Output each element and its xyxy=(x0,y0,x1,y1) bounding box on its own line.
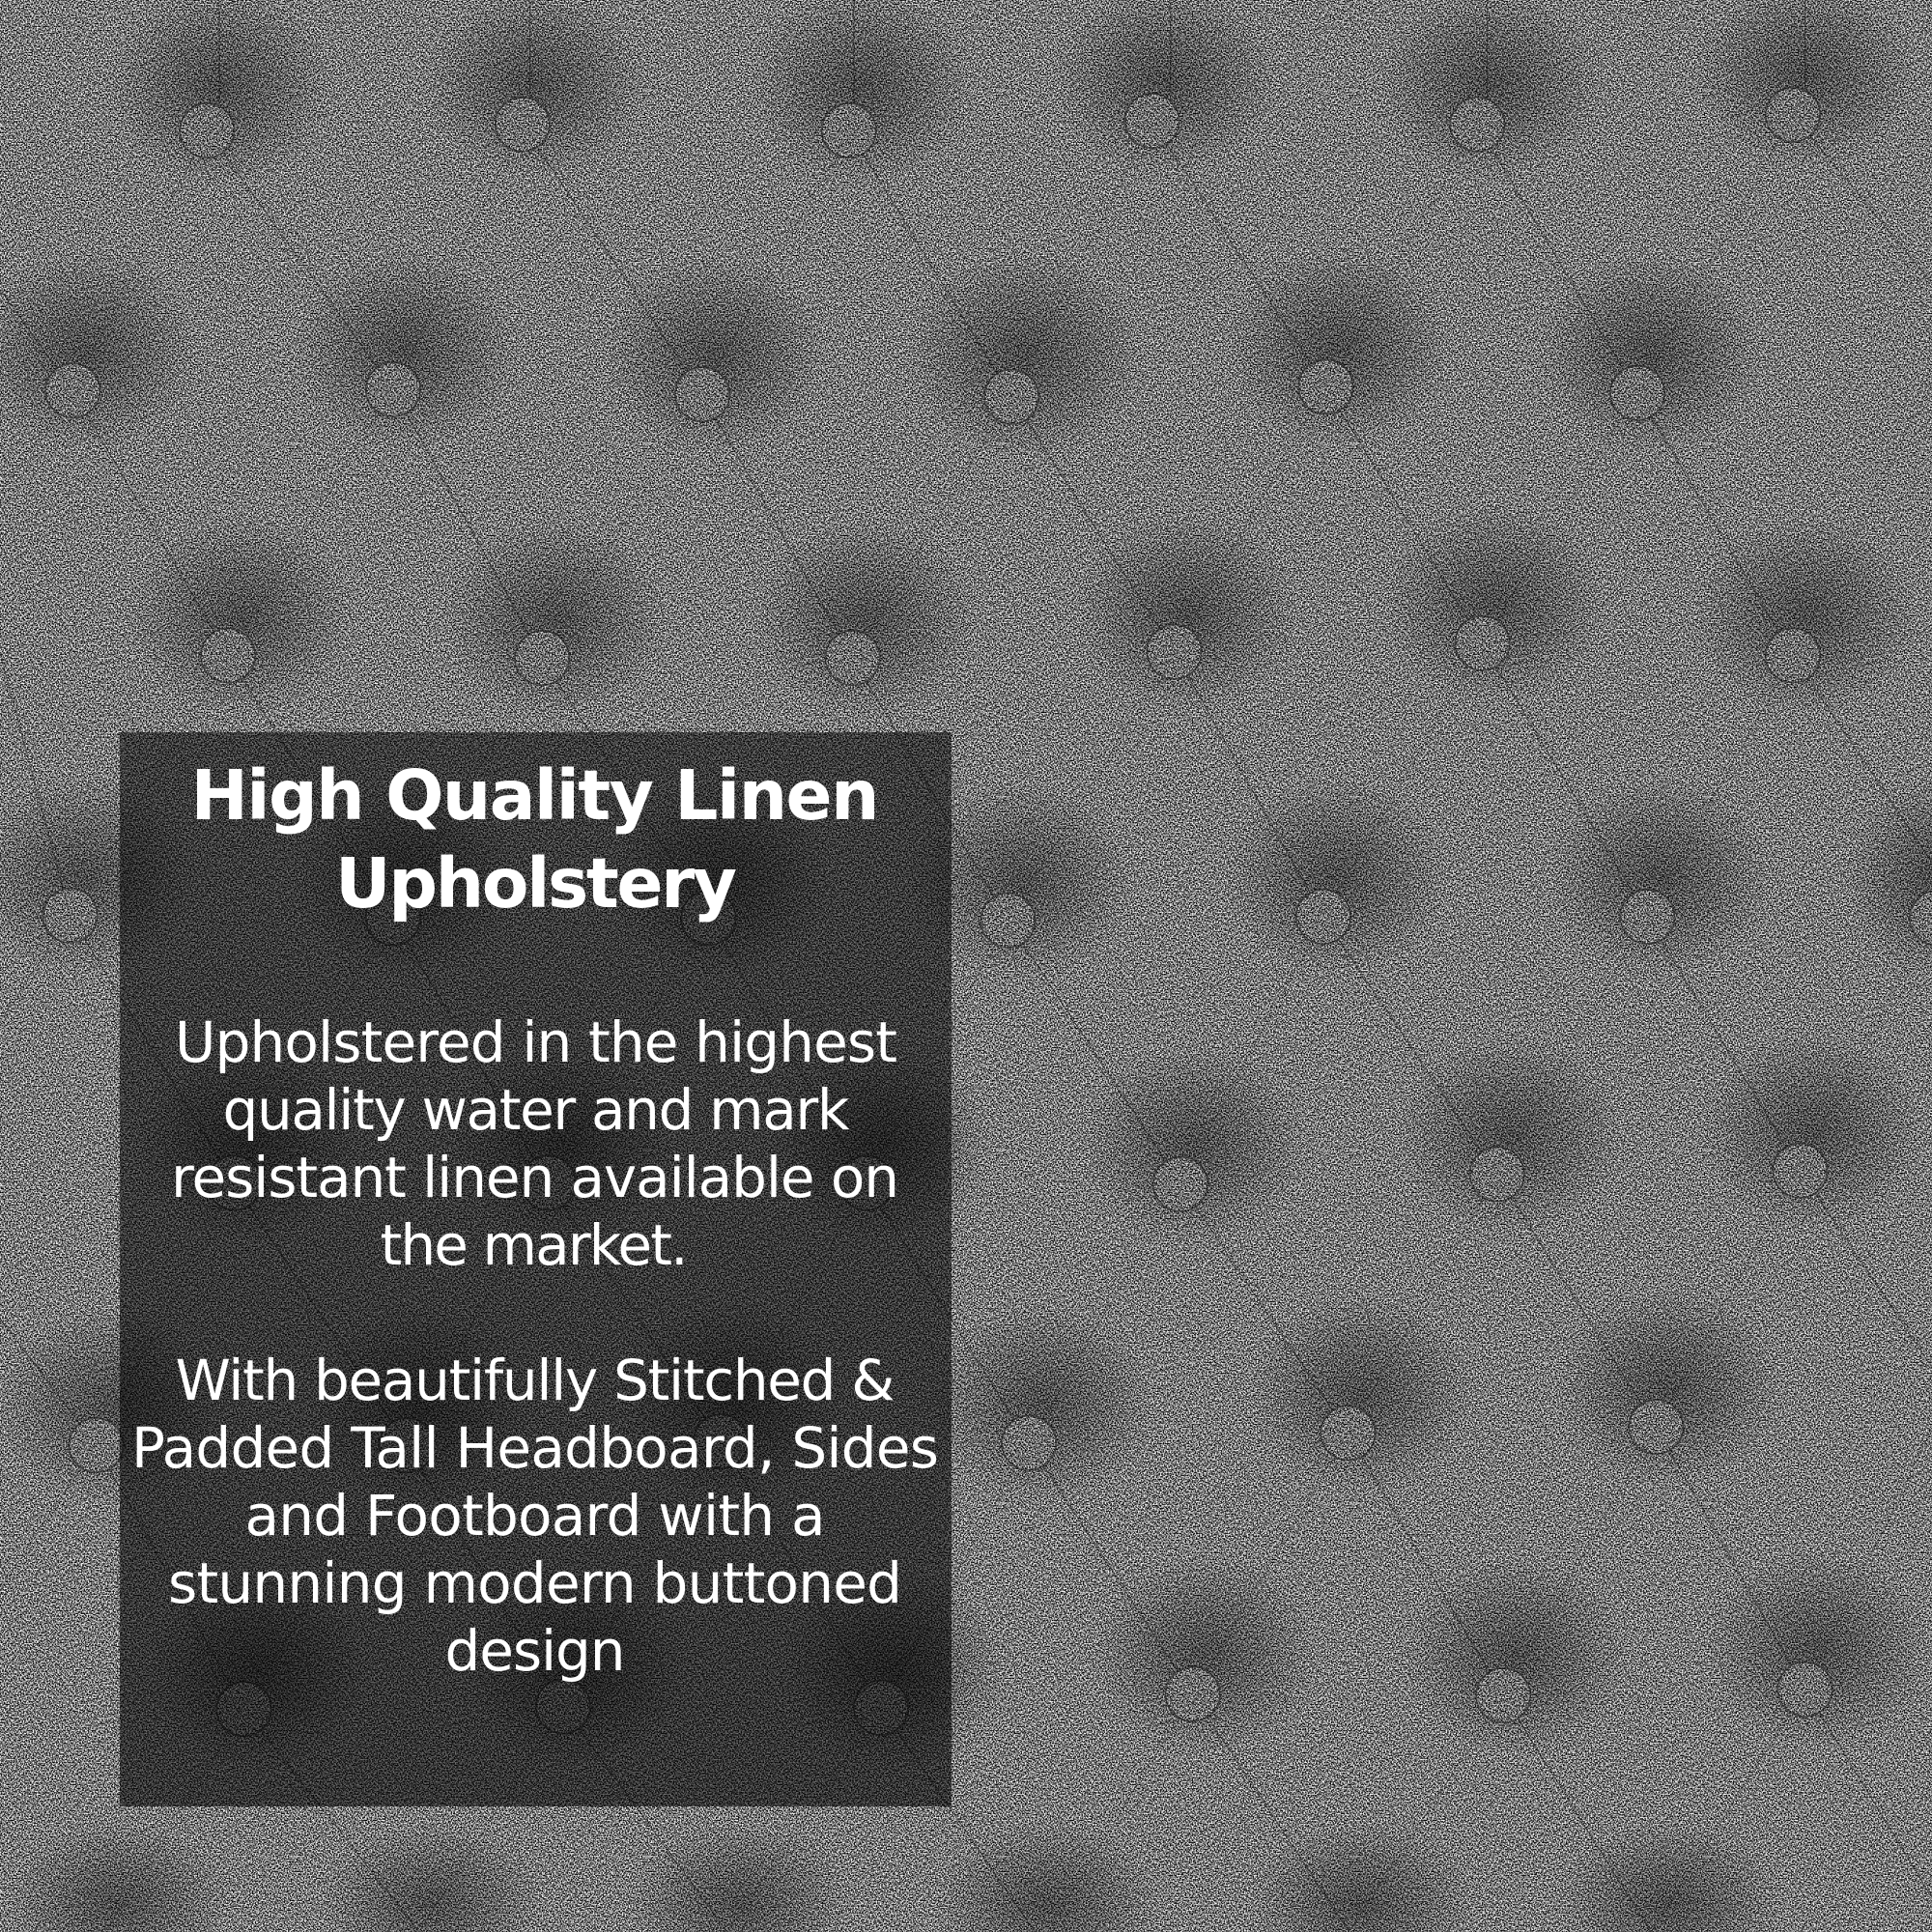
panel background xyxy=(120,732,952,1806)
heading xyxy=(191,755,879,923)
text block: headboard description: With beautifully Stitched & xyxy=(176,1348,895,1413)
text block: linen description: Upholstered in the highest xyxy=(175,1009,897,1075)
text block: headboard description: and Footboard with a xyxy=(245,1483,825,1548)
panel: translucent dark text box xyxy=(120,732,952,1806)
text block: linen description: the market. xyxy=(381,1212,688,1278)
text block: linen description: resistant linen available on xyxy=(171,1145,899,1210)
heading: Upholstery xyxy=(335,843,737,923)
text block: headboard description: Padded Tall Headboard, Sides xyxy=(131,1415,939,1481)
text block: headboard description: design xyxy=(444,1618,626,1684)
heading: High Quality Linen xyxy=(191,755,879,836)
text block: linen description: quality water and mark xyxy=(222,1077,850,1143)
text block: headboard description xyxy=(131,1348,939,1684)
text block: headboard description: stunning modern buttoned xyxy=(168,1550,902,1616)
text block: linen description xyxy=(171,1009,899,1278)
